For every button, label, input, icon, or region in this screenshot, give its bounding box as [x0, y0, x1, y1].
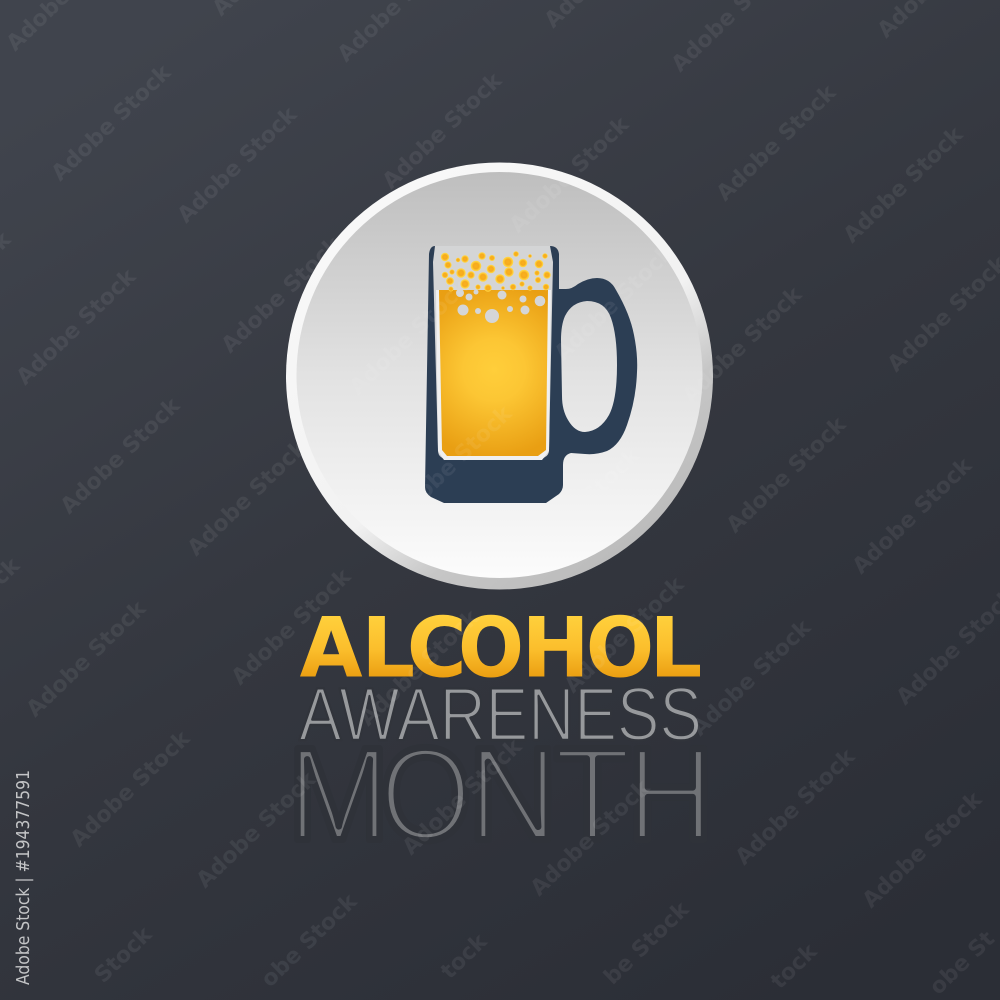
glass lower rim	[436, 290, 551, 460]
beer	[439, 290, 548, 456]
watermark pattern: Adobe Stock	[56, 392, 186, 519]
watermark pattern: Adobe Stock	[526, 774, 656, 901]
watermark pattern: obe Stock	[257, 888, 363, 992]
watermark pattern: Adobe Stock	[687, 614, 817, 741]
watermark pattern: Adobe Stock	[22, 595, 152, 722]
watermark pattern: Adobe Stock	[378, 67, 508, 194]
watermark pattern: Adobe Stock	[712, 79, 842, 206]
icon badge	[286, 162, 713, 590]
watermark pattern: Adobe Stock	[173, 101, 303, 228]
watermark pattern: Adobe Stock	[345, 273, 475, 400]
title line: ALCOHOL: O	[458, 600, 524, 696]
rising air bubbles	[456, 289, 545, 323]
foam bubbles	[441, 251, 551, 292]
title line: MONTH: T	[554, 720, 631, 868]
title line: AWARENESS: AWARENESS	[299, 672, 702, 756]
watermark pattern: Adobe Stock	[355, 604, 485, 731]
watermark pattern: Adobe Stock	[47, 59, 177, 186]
watermark pattern: Adobe Stock	[516, 442, 646, 569]
watermark pattern: obe St	[925, 926, 1000, 1000]
watermark pattern: tock	[436, 928, 493, 984]
badge rim	[286, 162, 713, 590]
watermark pattern: Adobe Stock	[505, 111, 635, 238]
badge disc	[296, 172, 702, 578]
glass interior	[433, 246, 553, 460]
title line: ALCOHOL: L	[649, 600, 702, 696]
title line: ALCOHOL: C	[407, 600, 467, 696]
title line: MONTH: M	[287, 720, 390, 868]
watermark pattern: Adobe Stock	[839, 121, 969, 248]
title line: MONTH: O	[380, 720, 472, 868]
title	[287, 600, 714, 868]
title line: MONTH: H	[627, 720, 714, 868]
watermark pattern: Adobe Stock	[678, 281, 808, 408]
icon: beer mug	[425, 246, 637, 503]
watermark pattern: Adobe Stock	[388, 400, 518, 527]
watermark pattern: Adobe Stock	[722, 411, 852, 538]
title line: ALCOHOL: H	[522, 600, 590, 696]
title line: ALCOHOL: O	[586, 600, 654, 696]
watermark pattern: Adobe Stock	[66, 725, 196, 852]
watermark pattern: tock	[766, 938, 823, 994]
watermark pattern: Adobe Stock	[227, 563, 357, 690]
watermark pattern: Adobe Stock	[848, 452, 978, 579]
watermark pattern: Adobe Stock	[398, 733, 528, 860]
watermark pattern: Adobe Stock	[183, 434, 313, 561]
title line: ALCOHOL: A	[300, 600, 363, 696]
watermark pattern: Adobe Stock	[560, 571, 690, 698]
watermark pattern: Adobe Stock	[217, 231, 347, 358]
watermark pattern: Adobe Stock	[550, 239, 680, 366]
mug body and handle	[425, 246, 637, 503]
title line: MONTH: N	[468, 720, 558, 868]
watermark pattern: be Stock	[599, 896, 695, 990]
watermark pattern: Adobe Stock	[192, 766, 322, 893]
stock id label: Adobe Stock | #194377591	[13, 770, 34, 985]
title line: ALCOHOL: L	[361, 600, 415, 696]
watermark pattern: Adobe Stock	[858, 786, 988, 913]
watermark pattern: Adobe Stock	[12, 263, 142, 390]
watermark pattern: Stock	[90, 921, 158, 988]
watermark pattern: Adobe Stock	[731, 743, 861, 870]
